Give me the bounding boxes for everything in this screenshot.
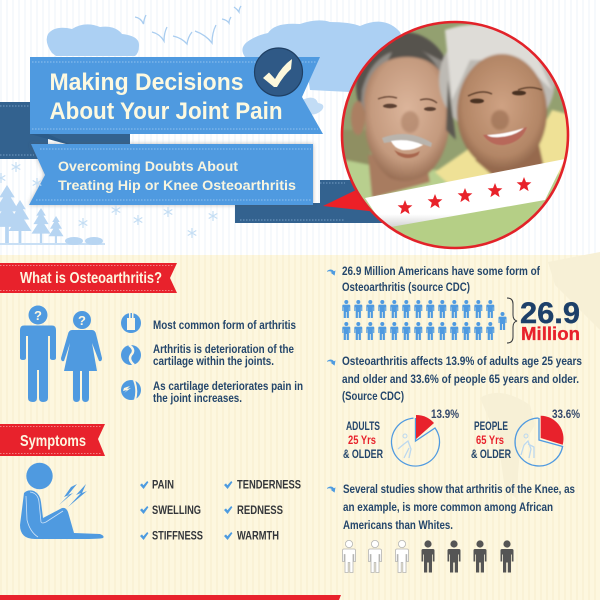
star band	[365, 159, 565, 228]
label: people	[471, 419, 511, 461]
icon: joint 1	[121, 313, 141, 333]
title	[50, 69, 282, 125]
trees and snowflakes	[0, 162, 217, 245]
title: Making Decisions	[50, 69, 244, 96]
nose shading	[401, 111, 419, 133]
panel: symptoms	[0, 424, 301, 542]
comparison text	[343, 482, 575, 532]
definition text: Most common form of arthritis	[153, 318, 296, 332]
icon: joint 3	[121, 380, 141, 400]
heading ribbon	[0, 263, 177, 293]
stars	[398, 177, 531, 214]
label: adults: & OLDER	[343, 447, 383, 461]
subtitle: Overcoming Doubts About	[58, 158, 238, 174]
arrow bullet	[327, 360, 336, 366]
symptom checklist: REDNESS	[237, 503, 283, 517]
world map watermark	[480, 252, 600, 498]
dark band right	[235, 180, 400, 223]
statistic text: Osteoarthritis (source CDC)	[342, 280, 470, 294]
subtitle	[58, 158, 296, 193]
pie chart: 13.9%	[392, 409, 459, 466]
big number: Million	[521, 323, 580, 344]
photo: smiling couple	[340, 20, 572, 250]
icon: joint 2	[121, 345, 141, 365]
woman face	[457, 54, 547, 170]
pictogram: people rows	[342, 300, 506, 340]
man hair	[354, 32, 445, 103]
panel: 26.9 million statistic	[327, 264, 580, 344]
statistic text	[342, 264, 541, 294]
title: About Your Joint Pain	[50, 98, 282, 125]
pie chart: 33.6%	[515, 409, 580, 466]
label: adults: 25 Yrs	[348, 433, 376, 447]
symptom checklist: STIFFNESS	[152, 528, 203, 542]
symptom checklist: PAIN	[152, 478, 174, 492]
pie chart: 33.6%: 33.6%	[552, 409, 580, 421]
cloud right	[242, 20, 420, 92]
header ribbons	[0, 48, 400, 223]
label: people: PEOPLE	[474, 419, 508, 433]
red fold	[323, 190, 378, 212]
man features	[378, 97, 437, 103]
birds	[135, 6, 241, 44]
cloud left	[47, 24, 139, 56]
prevalence text	[342, 354, 582, 403]
panel: knee arthritis comparison	[327, 482, 575, 572]
symptom checklist: TENDERNESS	[237, 478, 301, 492]
icon: seated person with knee pain	[20, 463, 104, 539]
woman features	[468, 88, 542, 96]
main ribbon	[30, 57, 323, 134]
label: adults: ADULTS	[346, 419, 380, 433]
definition text: As cartilage deteriorates pain in	[153, 379, 303, 393]
heading ribbon	[0, 424, 105, 456]
icon: man with question: ?	[34, 308, 42, 323]
pictogram: white figures	[342, 540, 408, 572]
icon: woman with question	[61, 311, 102, 402]
symptom checklist	[140, 478, 301, 542]
definition text: cartilage within the joints.	[153, 354, 274, 368]
big number: 26.9	[520, 297, 580, 330]
panel: age prevalence	[327, 354, 582, 466]
arrow bullet	[327, 487, 336, 493]
big number	[520, 297, 580, 344]
panel: what is osteoarthritis	[0, 263, 303, 405]
bottom red strip	[0, 595, 341, 600]
label: adults	[343, 419, 383, 461]
pie chart: 13.9%: 13.9%	[431, 409, 459, 421]
dark band left	[0, 102, 48, 159]
symptom checklist: WARMTH	[237, 528, 279, 542]
label: people: 65 Yrs	[476, 433, 504, 447]
heading ribbon: Symptoms	[20, 433, 86, 450]
check badge	[254, 48, 302, 96]
woman neck	[474, 144, 544, 174]
prevalence text: (Source CDC)	[342, 389, 404, 403]
man neck	[368, 155, 430, 198]
cloud small	[302, 98, 323, 114]
label: people: & OLDER	[471, 447, 511, 461]
woman hair	[438, 52, 556, 122]
definition text	[153, 318, 303, 405]
pictogram: dark figures	[422, 540, 514, 572]
symptom checklist: SWELLING	[152, 503, 201, 517]
arrow bullet	[327, 270, 336, 276]
subtitle: Treating Hip or Knee Osteoarthritis	[58, 177, 296, 193]
heading ribbon: What is Osteoarthritis?	[20, 270, 162, 287]
comparison text: Americans than Whites.	[343, 518, 453, 532]
definition text: Arthritis is deterioration of the	[153, 342, 294, 356]
icon: woman with question: ?	[78, 313, 86, 328]
man face	[364, 57, 450, 181]
subtitle ribbon	[29, 144, 313, 205]
brace	[507, 298, 517, 343]
man ear	[351, 101, 365, 135]
statistic text: 26.9 Million Americans have some form of	[342, 264, 541, 278]
shirts	[346, 159, 560, 232]
definition text: the joint increases.	[153, 391, 242, 405]
icon: man with question	[20, 306, 56, 402]
comparison text: an example, is more common among African	[343, 500, 553, 514]
clouds and birds	[47, 6, 420, 114]
